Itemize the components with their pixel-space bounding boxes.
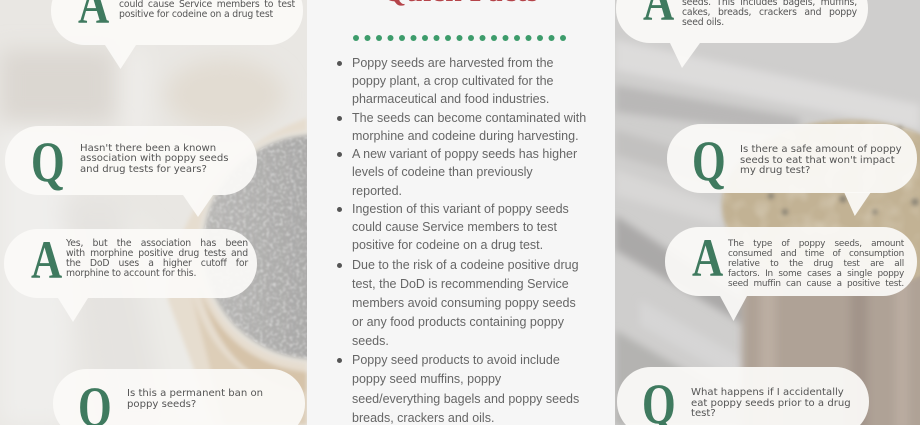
- panel: left bubble, answer about morphine cutoff: [4, 229, 257, 298]
- question text: [127, 388, 263, 410]
- bullet list: could cause Service members to test: [352, 220, 557, 234]
- bullet list: members avoid consuming poppy seeds: [352, 296, 576, 310]
- question text: my drug test?: [740, 165, 810, 176]
- question text: Hasn't there been a known: [80, 142, 216, 154]
- panel: right bubble, answer about products: [616, 0, 868, 43]
- bullet list: reported.: [352, 184, 402, 198]
- answer text: [682, 0, 857, 28]
- answer text: [728, 238, 904, 289]
- bullet list: seeds.: [352, 334, 389, 348]
- answer text: Yes, but the association has been: [66, 238, 248, 249]
- answer text: consumed and time of consumption: [728, 249, 904, 259]
- letter Q: Q: [31, 131, 65, 194]
- answer text: relative to the drug test are all: [728, 259, 904, 269]
- panel: right bubble, answer about factors: [665, 227, 917, 296]
- question text: eat poppy seeds prior to a drug: [691, 398, 851, 409]
- bullet list: The seeds can become contaminated with: [352, 111, 586, 125]
- question text: Is this a permanent ban on: [127, 388, 263, 399]
- panel: right bubble, question about safe amount: [667, 124, 917, 193]
- answer text: seed muffin can cause a positive test.: [728, 279, 904, 289]
- answer text: morphine to account for this.: [66, 268, 196, 279]
- bullet list: positive for codeine on a drug test.: [352, 238, 543, 252]
- letter A: A: [692, 228, 723, 288]
- bullet list: A new variant of poppy seeds has higher: [352, 147, 577, 161]
- question text: and drug tests for years?: [80, 164, 207, 175]
- panel: left bubble, question about permanent ban: [53, 369, 305, 425]
- question text: Is there a safe amount of poppy: [740, 144, 902, 155]
- letter Q: Q: [692, 130, 726, 193]
- question text: [80, 142, 229, 175]
- bubble tail: [670, 43, 700, 68]
- bullet list: test, the DoD is recommending Service: [352, 277, 569, 291]
- bullet list: Ingestion of this variant of poppy seeds: [352, 202, 569, 216]
- question text: poppy seeds?: [127, 399, 196, 410]
- bullet list: Poppy seed products to avoid include: [352, 353, 560, 367]
- bullet list: poppy seed muffins, poppy: [352, 372, 501, 386]
- bullet list: breads, crackers and oils.: [352, 411, 494, 425]
- panel: left bubble, answer about testing positive for codeine: [51, 0, 303, 45]
- bullet list: pharmaceutical and food industries.: [352, 92, 549, 106]
- letter A: A: [31, 230, 62, 290]
- answer text: seed oils.: [682, 17, 724, 28]
- bullet list: poppy plant, a crop cultivated for the: [352, 74, 554, 88]
- panel: quick facts: [307, 0, 615, 425]
- bubble tail: [58, 298, 88, 322]
- question text: test?: [691, 408, 716, 419]
- question text: What happens if I accidentally: [691, 387, 844, 398]
- question text: [691, 387, 851, 419]
- answer text: positive for codeine on a drug test: [119, 9, 273, 20]
- bullet list: or any food products containing poppy: [352, 315, 564, 329]
- panel: left bubble, question about known association: [5, 126, 257, 195]
- bullet list: Poppy seeds are harvested from the: [352, 56, 554, 70]
- answer text: cakes, breads, crackers and poppy: [682, 7, 857, 18]
- dotted divider: [353, 35, 566, 41]
- bullet list: [337, 56, 586, 425]
- answer text: with morphine positive drug tests and: [66, 248, 248, 259]
- bullet list: morphine and codeine during harvesting.: [352, 129, 579, 143]
- answer text: [66, 238, 248, 279]
- bullet list: Due to the risk of a codeine positive drug: [352, 258, 579, 272]
- question text: [740, 144, 902, 176]
- bubble tail: [720, 296, 747, 321]
- question text: association with poppy seeds: [80, 153, 229, 164]
- question text: seeds to eat that won't impact: [740, 155, 895, 166]
- bubble tail: [183, 195, 213, 217]
- answer text: [119, 0, 295, 20]
- bubble tail: [105, 45, 136, 69]
- bubble tail: [844, 192, 871, 216]
- answer text: the DoD uses a higher cutoff for: [66, 258, 248, 269]
- panel: right bubble, question about accidental consumption: [617, 367, 869, 425]
- answer text: factors. In some cases a single poppy: [728, 269, 904, 279]
- bullet list: seed/everything bagels and poppy seeds: [352, 392, 579, 406]
- answer text: The type of poppy seeds, amount: [728, 238, 904, 248]
- bullet list: levels of codeine than previously: [352, 165, 533, 179]
